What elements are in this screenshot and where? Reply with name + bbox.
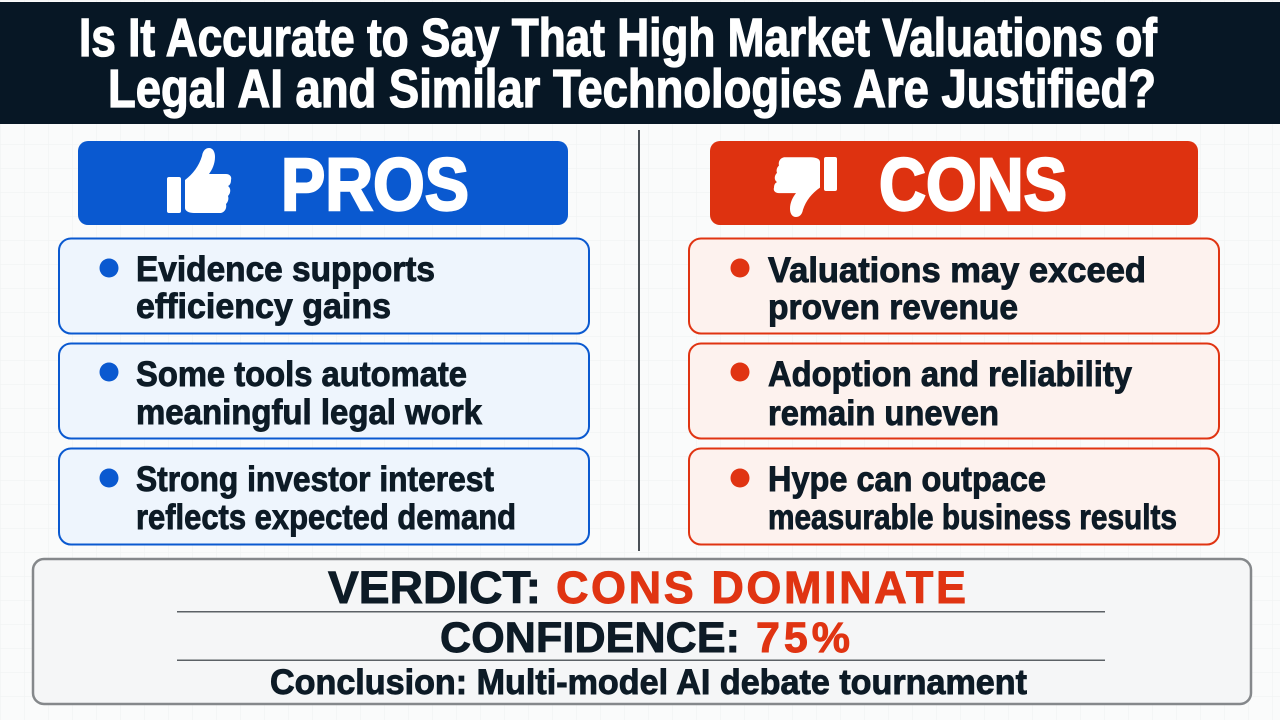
- verdict line: [328, 562, 966, 613]
- pro item 2: [59, 344, 589, 438]
- con item 1: proven revenue: [768, 288, 1018, 327]
- con item 2: remain uneven: [768, 394, 999, 433]
- con item 3: [689, 448, 1219, 544]
- pro item 1: [59, 238, 589, 334]
- pros label: PROS: [281, 143, 469, 226]
- con item 2: Adoption and reliability: [768, 355, 1132, 394]
- icon: thumbs up: [167, 148, 231, 213]
- verdict line: VERDICT:: [328, 562, 541, 613]
- con item 3: measurable business results: [768, 498, 1177, 537]
- conclusion line: Conclusion: Multi-model AI debate tournament: [270, 663, 1027, 702]
- panel: pros: [59, 141, 589, 544]
- pro item 1: Evidence supports: [136, 250, 435, 289]
- title text: [79, 8, 1158, 119]
- center divider: [638, 130, 640, 551]
- confidence line: CONFIDENCE:: [440, 614, 740, 662]
- cons header: [710, 141, 1198, 226]
- con item 2: [689, 344, 1219, 438]
- verdict line: CONS DOMINATE: [556, 562, 966, 613]
- pro item 3: [59, 448, 589, 544]
- pro item 1: efficiency gains: [136, 287, 391, 326]
- con item 1: [689, 238, 1219, 334]
- panel: cons: [689, 141, 1219, 544]
- pro item 2: Some tools automate: [136, 355, 467, 394]
- pro item 3: reflects expected demand: [136, 498, 516, 537]
- pros header: [78, 141, 568, 226]
- confidence line: 75%: [756, 614, 850, 662]
- panel: verdict: [33, 559, 1251, 704]
- pro item 3: Strong investor interest: [136, 460, 494, 499]
- pro item 2: meaningful legal work: [136, 393, 482, 432]
- con item 3: Hype can outpace: [768, 460, 1046, 499]
- con item 1: Valuations may exceed: [768, 251, 1146, 290]
- icon: thumbs down: [774, 157, 837, 217]
- title banner: [0, 2, 1280, 124]
- cons label: CONS: [879, 143, 1067, 226]
